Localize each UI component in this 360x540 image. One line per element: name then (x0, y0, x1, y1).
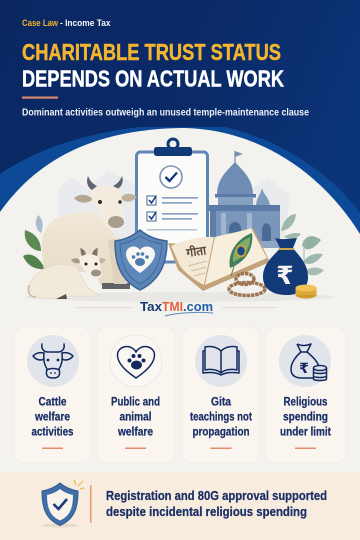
hero illustration (23, 139, 335, 302)
icon: heart with paw (110, 335, 162, 387)
conclusion text: Registration and 80G approval supported (106, 488, 327, 503)
clipboard (136, 139, 208, 262)
kicker: Case Law (22, 18, 59, 28)
label (190, 394, 252, 438)
label: Cattle (38, 394, 67, 408)
label (111, 394, 160, 438)
card: cattle welfare (14, 327, 91, 463)
horns (87, 176, 97, 190)
brand logo: Tax (140, 300, 162, 314)
label: Public and (111, 394, 160, 408)
label: propagation (192, 424, 250, 438)
header text (22, 18, 309, 118)
label: spending (283, 410, 328, 424)
label (280, 394, 331, 438)
label: activities (32, 424, 74, 438)
adult cow (42, 176, 137, 289)
header text: - Income Tax (60, 18, 110, 28)
label: animal (120, 410, 152, 424)
card: religious spending (266, 327, 346, 463)
card: public and animal welfare (97, 327, 175, 463)
left leaves (23, 215, 61, 269)
money bag (263, 238, 308, 295)
label (32, 394, 74, 438)
prayer beads (229, 274, 265, 296)
icon: cow head (27, 335, 79, 387)
calf (28, 248, 106, 299)
open book: गीता (184, 241, 208, 261)
title line 1: CHARITABLE TRUST STATUS (22, 39, 281, 65)
label: welfare (34, 410, 70, 424)
faint backdrop (58, 170, 135, 270)
brand logo: .com (183, 300, 213, 314)
conclusion band (0, 472, 360, 540)
label: Gita (211, 394, 231, 408)
label: teachings not (190, 410, 252, 424)
open book (168, 228, 270, 291)
face (91, 185, 124, 229)
paw shield (115, 230, 167, 290)
icon: check shield (42, 480, 84, 528)
brand logo: TMI (162, 300, 183, 314)
temple (209, 151, 282, 248)
title line 2: DEPENDS ON ACTUAL WORK (22, 66, 284, 92)
card: gita teachings (182, 327, 260, 463)
label: under limit (280, 424, 331, 438)
brand logo (76, 300, 278, 316)
label: Religious (284, 394, 328, 408)
conclusion text: despite incidental religious spending (106, 504, 307, 519)
money bag: ₹ (276, 261, 294, 290)
subtitle: Dominant activities outweigh an unused temple-maintenance clause (22, 106, 309, 118)
icon: open book (195, 335, 247, 387)
accent rule (22, 96, 58, 99)
label: welfare (117, 424, 153, 438)
right leaves (281, 214, 324, 285)
gold coins (296, 284, 316, 298)
ears (74, 195, 93, 203)
peacock feather (230, 233, 252, 276)
body (42, 211, 122, 285)
conclusion text (106, 488, 327, 519)
icon: money bag with coins: ₹ (299, 361, 309, 377)
